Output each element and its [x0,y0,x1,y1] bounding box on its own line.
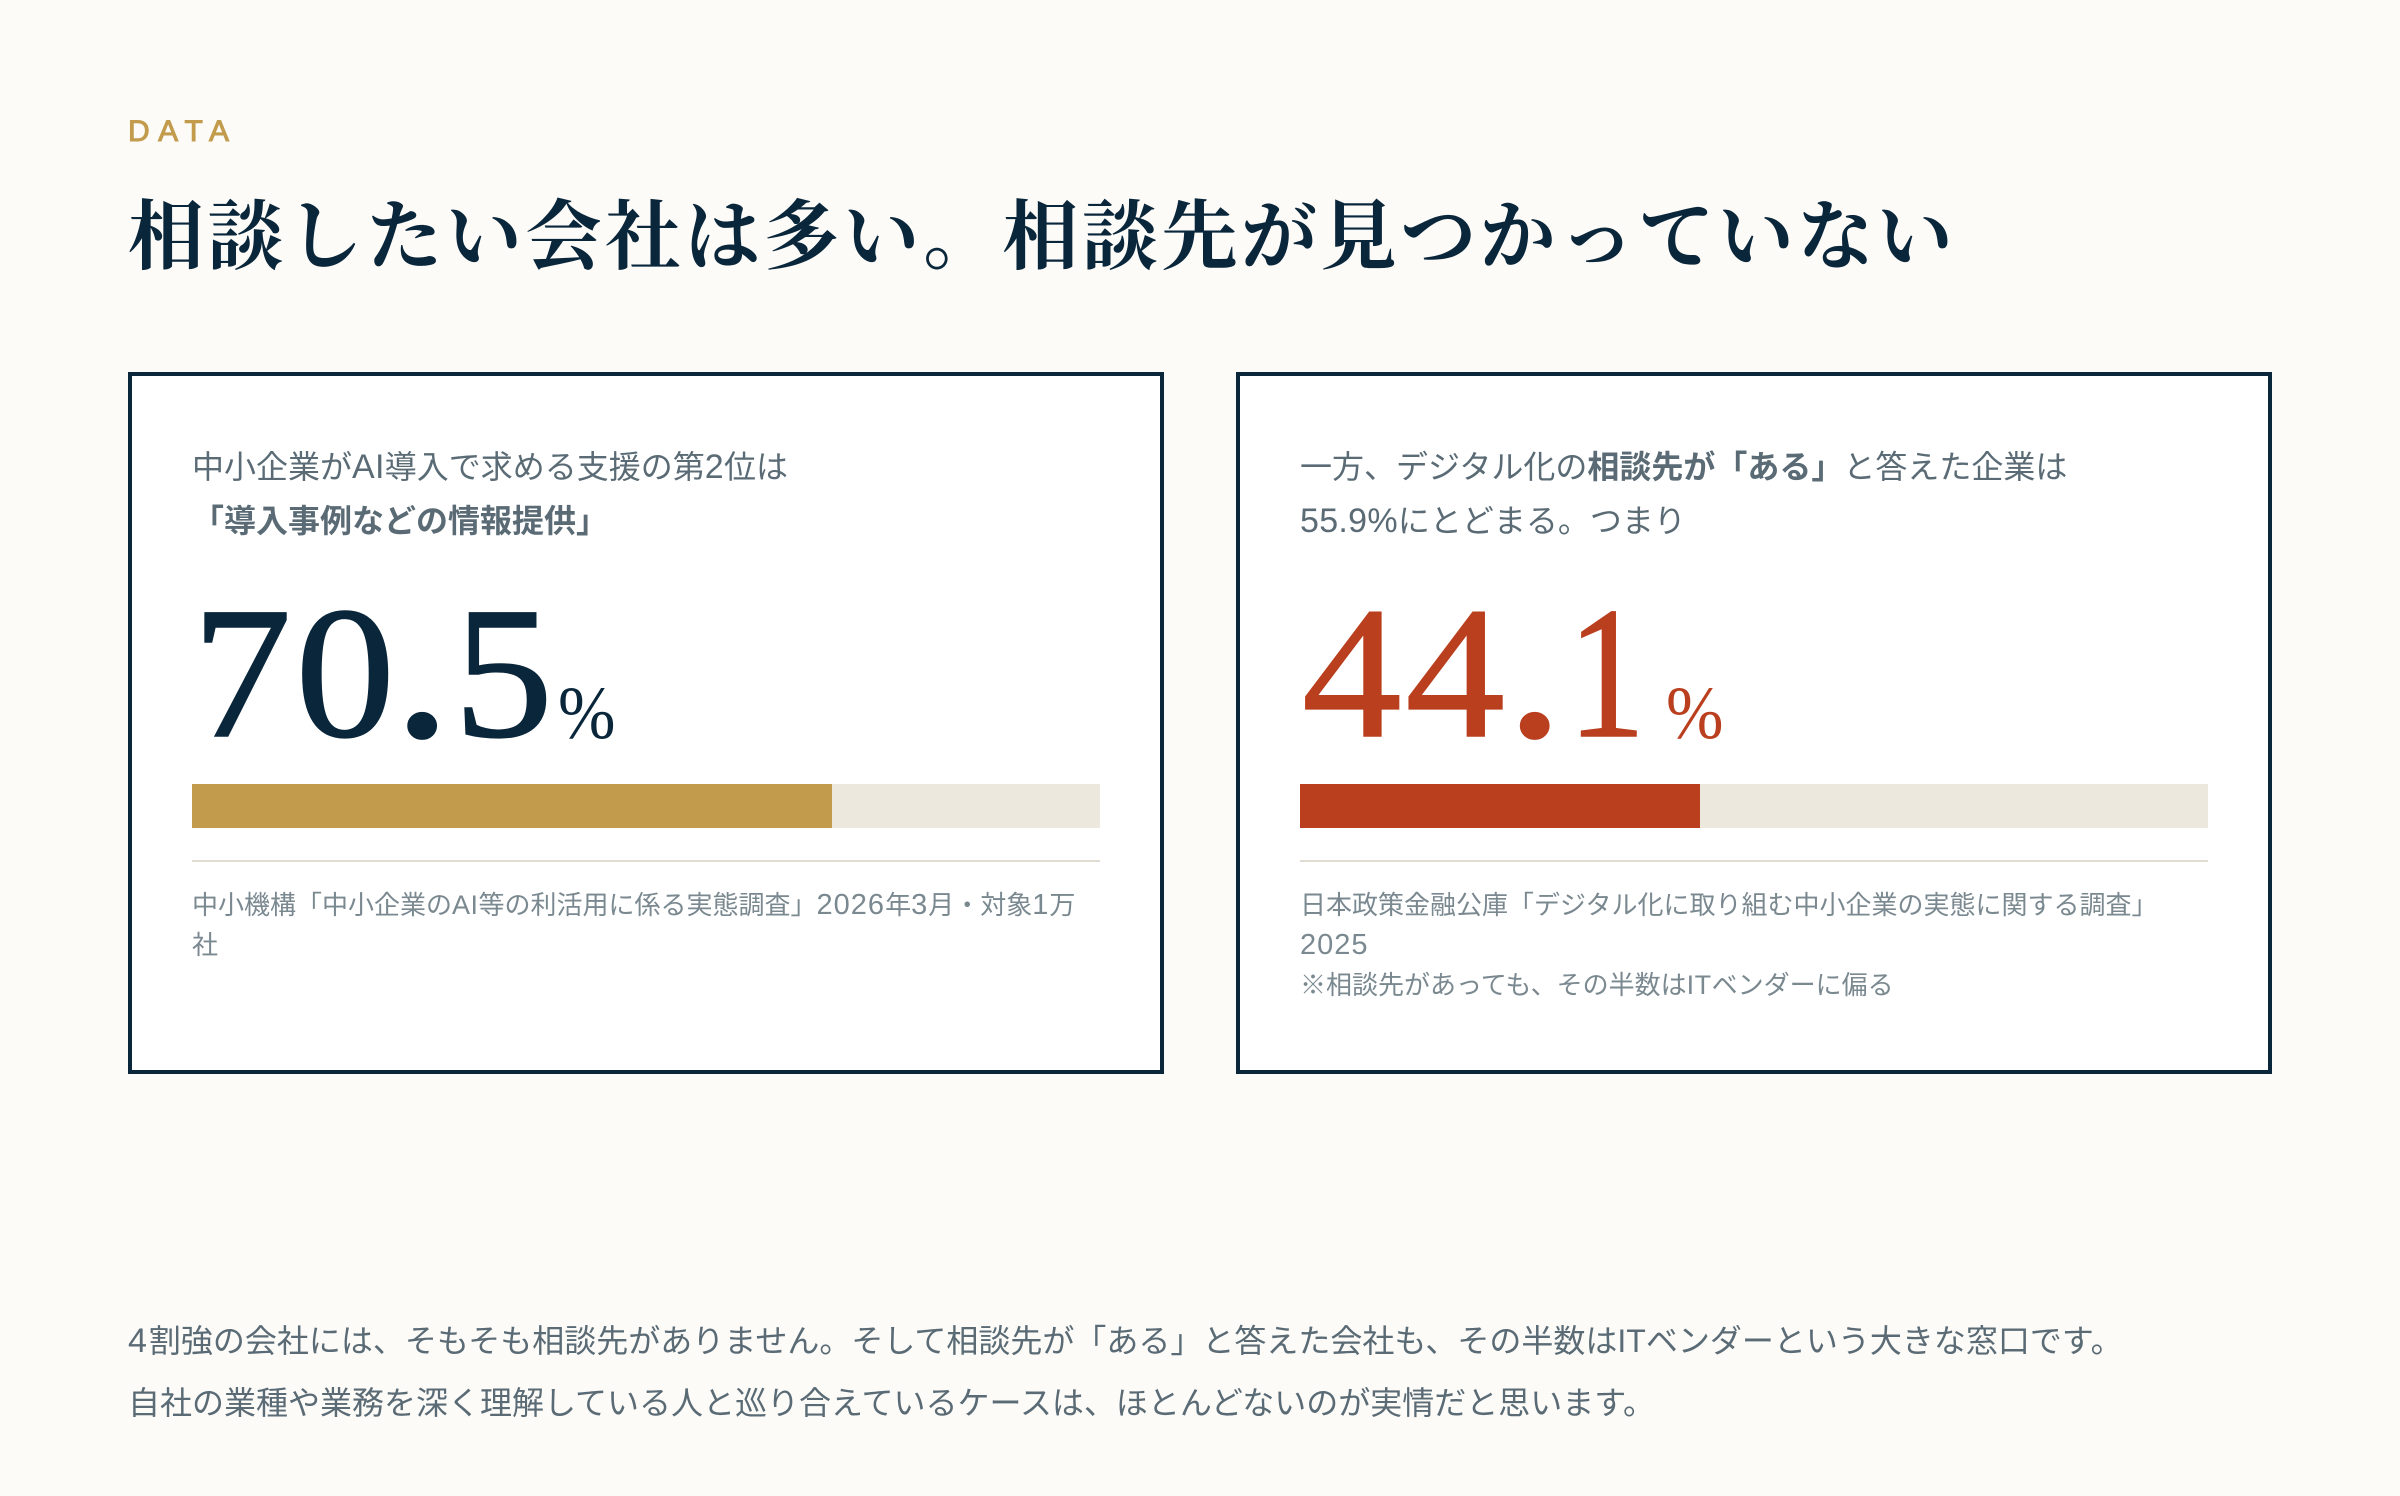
source note: 日本政策金融公庫「デジタル化に取り組む中小企業の実態に関する調査」 [1300,890,2157,920]
conclusion text [128,1322,2123,1421]
percent sign: % [1666,672,1723,755]
bar fill [1300,784,1700,828]
progress bar [1300,784,2208,828]
big number: 1 [1568,568,1649,777]
panel: 44.1 percent [1236,372,2272,1074]
lead text: 一方、デジタル化の相談先が「ある」と答えた企業は [1300,449,2067,485]
title: 相談したい会社は多い。相談先が見つかっていない [128,196,1956,280]
lead text: 中小企業がAI導入で求める支援の第2位は [192,448,788,486]
lead text: 「導入事例などの情報提供」 [192,503,608,539]
progress bar [192,784,1100,828]
source note: ※相談先があっても、その半数はITベンダーに偏る [1300,970,1894,1000]
lead text [1300,449,2067,540]
conclusion text: 自社の業種や業務を深く理解している人と巡り合えているケースは、ほとんどないのが実情だと思います。 [128,1385,1655,1421]
source note [1300,890,2157,1000]
source note: 社 [192,930,218,960]
big number: 44. [1302,535,1568,785]
source note: 中小機構「中小企業のAI等の利活用に係る実態調査」2026年3月・対象1万 [192,889,1075,921]
bar fill [192,784,832,828]
lead text: 55.9%にとどまる。つまり [1300,502,1686,540]
eyebrow label: DATA [128,115,238,148]
source note: 2025 [1300,929,1369,961]
panel: 70.5 percent [128,372,1164,1074]
source note [192,889,1075,960]
big number: 70.5 [192,535,557,785]
percent sign: % [558,672,615,755]
conclusion text: 4割強の会社には、そもそも相談先がありません。そして相談先が「ある」と答えた会社も、その半数はITベンダーという大きな窓口です。 [128,1322,2123,1360]
lead text [192,448,788,539]
